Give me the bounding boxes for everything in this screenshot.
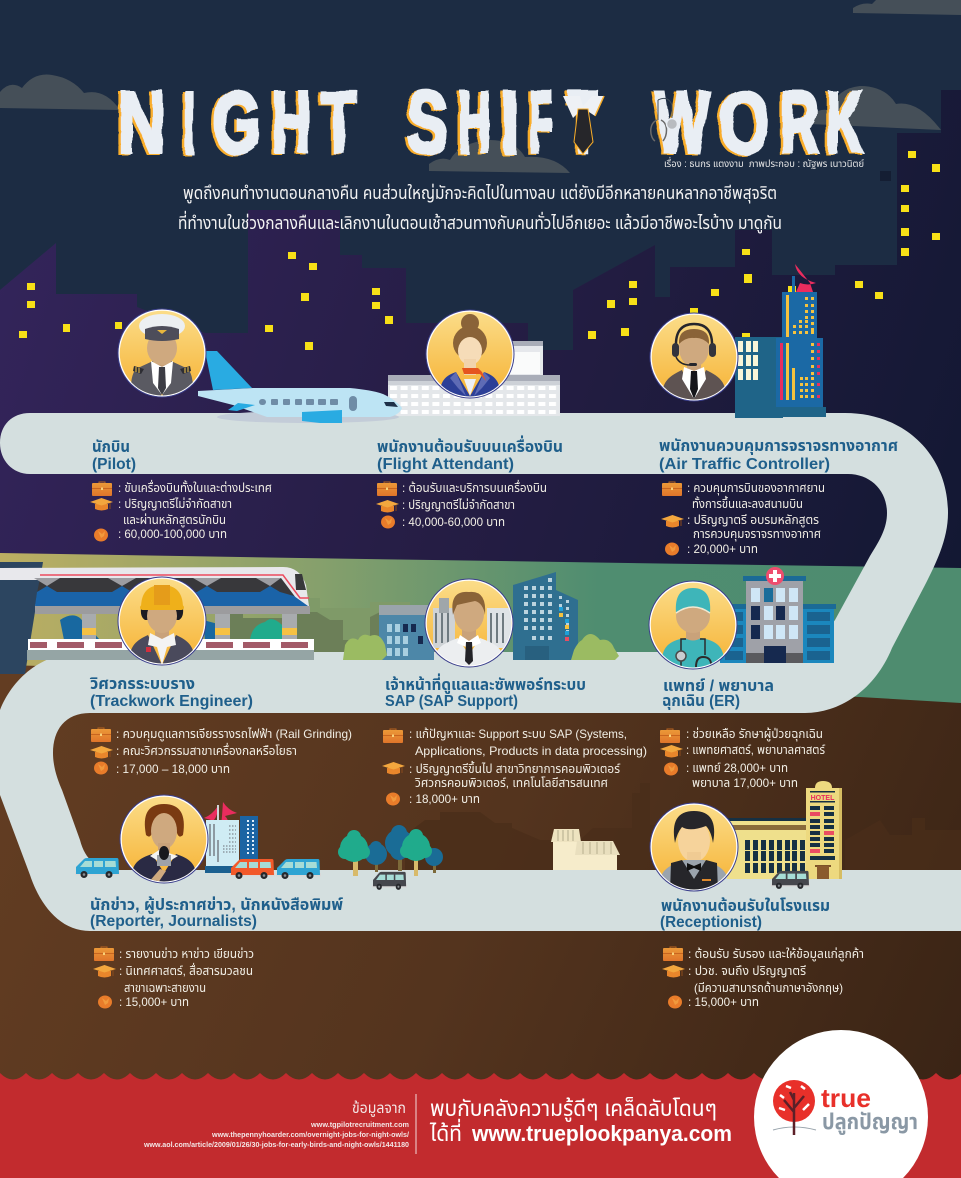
title: NIGHT SHIFT WORK: I xyxy=(183,75,195,171)
title: NIGHT SHIFT WORK: G xyxy=(213,75,261,171)
panel: reporter: : นิเทศศาสตร์, สื่อสารมวลชน xyxy=(119,962,253,978)
title: NIGHT SHIFT WORK: S xyxy=(406,75,448,171)
title: NIGHT SHIFT WORK: R xyxy=(780,75,819,171)
avatar: trackwork engineer xyxy=(118,577,206,666)
panel: trackwork engineer: : 17,000 – 18,000 บาท xyxy=(116,762,230,776)
left dark building xyxy=(0,562,43,674)
scene: hotel: HOTEL xyxy=(811,795,835,802)
brown ground xyxy=(0,665,961,1080)
title: NIGHT SHIFT WORK: I xyxy=(501,75,519,171)
panel: doctor and nurse: : ช่วยเหลือ รักษาผู้ป่วยฉุกเฉิน xyxy=(686,727,823,741)
title: NIGHT SHIFT WORK: F xyxy=(529,75,553,171)
avatar: flight attendant xyxy=(426,310,514,399)
cloud: left xyxy=(0,75,120,110)
panel: flight attendant: : ปริญญาตรีไม่จำกัดสาขา xyxy=(402,498,515,512)
logo badge xyxy=(754,1030,928,1178)
panel: doctor and nurse: : แพทย์ 28,000+ บาท xyxy=(686,761,788,775)
avatar: reporter xyxy=(120,795,208,884)
purple city skyline and night ground xyxy=(0,90,961,570)
panel: doctor and nurse: ฉุกเฉิน (ER) xyxy=(662,693,740,710)
panel: air traffic controller: : 20,000+ บาท xyxy=(687,542,758,556)
green band distant buildings xyxy=(297,598,410,655)
avatar: pilot xyxy=(118,309,206,398)
panel: air traffic controller xyxy=(659,438,898,556)
sources xyxy=(143,1100,410,1149)
car: dark by hotel xyxy=(771,871,810,889)
call to action: พบกับคลังความรู้ดีๆ เคล็ดลับโดนๆ xyxy=(430,1096,717,1122)
panel: air traffic controller: (Air Traffic Controller) xyxy=(659,456,830,473)
panel: flight attendant xyxy=(376,435,563,529)
cloud: center xyxy=(429,140,570,173)
avatar: SAP support xyxy=(425,579,513,668)
panel: SAP support: Applications, Products in data processing) xyxy=(415,744,647,758)
panel: pilot: (Pilot) xyxy=(92,456,136,473)
panel: reporter: สาขาเฉพาะสายงาน xyxy=(124,981,206,995)
icon: collar and tie on the T xyxy=(563,96,604,154)
lit windows xyxy=(19,151,940,350)
title: NIGHT SHIFT WORK: K xyxy=(826,75,863,171)
panel: SAP support: วิศวกรคอมพิวเตอร์, เทคโนโลยีสารสนเทศ xyxy=(414,776,608,790)
panel: receptionist: พนักงานต้อนรับในโรงแรม xyxy=(661,897,830,915)
panel: doctor and nurse xyxy=(660,678,826,790)
bush: right xyxy=(571,634,619,660)
scene: airplane xyxy=(198,351,402,423)
call to action: www.trueplookpanya.com xyxy=(471,1121,732,1146)
call to action xyxy=(429,1096,732,1146)
panel: SAP support: : แก้ปัญหาและ Support ระบบ SAP (Systems, xyxy=(409,727,627,741)
logo badge: true xyxy=(821,1083,871,1113)
panel: pilot: : 60,000-100,000 บาท xyxy=(118,527,227,541)
panel: reporter: (Reporter, Journalists) xyxy=(90,913,257,930)
panel: doctor and nurse: พยาบาล 17,000+ บาท xyxy=(692,776,798,790)
sources: ข้อมูลจาก xyxy=(352,1100,406,1117)
scene: air traffic control tower xyxy=(735,264,826,418)
title: NIGHT SHIFT WORK: T xyxy=(321,75,357,171)
panel: air traffic controller: พนักงานควบคุมการจราจรทางอากาศ xyxy=(659,438,898,455)
panel: receptionist: (มีความสามารถด้านภาษาอังกฤษ) xyxy=(694,981,843,995)
panel: flight attendant: : 40,000-60,000 บาท xyxy=(402,515,505,529)
avatar: receptionist xyxy=(650,803,738,892)
panel: receptionist: (Receptionist) xyxy=(660,914,762,931)
title: NIGHT SHIFT WORK: W xyxy=(655,75,710,171)
panel: SAP support: : ปริญญาตรีขึ้นไป สาขาวิทยาการคอมพิวเตอร์ xyxy=(409,760,621,776)
cloud: behind WORK xyxy=(810,86,941,130)
panel: receptionist: : ต้อนรับ รับรอง และให้ข้อมูลแก่ลูกค้า xyxy=(688,947,864,961)
panel: pilot: นักบิน xyxy=(92,439,130,456)
panel: trackwork engineer: วิศวกรระบบราง xyxy=(90,676,195,693)
intro text: พูดถึงคนทำงานตอนกลางคืน คนส่วนใหญ่มักจะคิดไปในทางลบ แต่ยังมีอีกหลายคนหลากอาชีพสุจริต xyxy=(183,183,777,205)
winding road xyxy=(0,413,961,931)
panel: doctor and nurse: แพทย์ / พยาบาล xyxy=(663,678,774,695)
call to action: ได้ที่ xyxy=(429,1118,462,1146)
byline: เรื่อง : ธนกร แตงงาม ภาพประกอบ : ณัฐพร เนาวนิตย์ xyxy=(664,156,864,170)
panel: receptionist xyxy=(660,897,864,1009)
panel: SAP support xyxy=(382,673,647,806)
panel: air traffic controller: การควบคุมจราจรทางอากาศ xyxy=(693,527,821,541)
panel: air traffic controller: ทั้งการขึ้นและลงสนามบิน xyxy=(692,495,803,511)
panel: flight attendant: (Flight Attendant) xyxy=(377,456,514,473)
scene: hospital xyxy=(718,567,836,663)
panel: reporter: : 15,000+ บาท xyxy=(119,995,189,1009)
panel: reporter: : รายงานข่าว หาข่าว เขียนข่าว xyxy=(119,947,254,961)
title: NIGHT SHIFT WORK xyxy=(118,75,863,171)
icon: stethoscope on the W xyxy=(651,98,678,141)
avatar: doctor nurse xyxy=(649,581,737,670)
cloud: top right xyxy=(853,0,961,15)
panel: air traffic controller: : ควบคุมการบินของอากาศยาน xyxy=(687,481,825,495)
scene: airport terminal xyxy=(388,341,560,416)
green dawn band xyxy=(0,553,961,710)
panel: doctor and nurse: : แพทยศาสตร์, พยาบาลศาสตร์ xyxy=(686,743,826,757)
panel: flight attendant: พนักงานต้อนรับบนเครื่องบิน xyxy=(377,435,563,456)
title: NIGHT SHIFT WORK: N xyxy=(118,75,166,171)
car: blue left xyxy=(75,858,120,878)
sources: www.aol.com/article/2009/01/26/30-jobs-for-early-birds-and-night-owls/1441180 xyxy=(143,1140,409,1149)
scene: houses xyxy=(551,829,620,870)
trees xyxy=(338,825,443,876)
bush: left xyxy=(343,635,387,660)
footer band xyxy=(0,1073,961,1178)
panel: receptionist: : ปวช. จนถึง ปริญญาตรี xyxy=(688,964,806,978)
panel: flight attendant: : ต้อนรับและบริการบนเครื่องบิน xyxy=(402,479,547,495)
intro text: ที่ทำงานในช่วงกลางคืนและเลิกงานในตอนเช้าสวนทางกับคนทั่วไปอีกเยอะ แล้วมีอาชีพอะไรบ้าง มาดูกัน xyxy=(178,210,782,235)
panel: SAP support: : 18,000+ บาท xyxy=(409,792,480,806)
title: NIGHT SHIFT WORK: H xyxy=(458,75,491,171)
title: NIGHT SHIFT WORK: T xyxy=(568,75,598,171)
scene: TV station xyxy=(204,802,258,873)
logo badge: ปลูกปัญญา xyxy=(822,1109,918,1135)
panel: SAP support: เจ้าหน้าที่ดูแลและซัพพอร์ทระบบ xyxy=(385,673,586,695)
panel: SAP support: SAP (SAP Support) xyxy=(385,693,518,710)
panel: trackwork engineer: (Trackwork Engineer) xyxy=(90,693,253,710)
panel: air traffic controller: : ปริญญาตรี อบรมหลักสูตร xyxy=(687,513,819,527)
car: blue right xyxy=(276,859,321,879)
scene: skytrain viaduct xyxy=(0,567,314,660)
sources: www.tgpilotrecruitment.com xyxy=(310,1120,409,1129)
car: orange xyxy=(230,859,275,879)
panel: pilot: : ขับเครื่องบินทั้งในและต่างประเทศ xyxy=(118,479,272,495)
panel: trackwork engineer xyxy=(90,676,352,776)
panel: reporter: นักข่าว, ผู้ประกาศข่าว, นักหนังสือพิมพ์ xyxy=(90,896,343,915)
panel: reporter xyxy=(90,896,343,1009)
panel: pilot: : ปริญญาตรีไม่จำกัดสาขา xyxy=(118,497,232,511)
title: NIGHT SHIFT WORK: O xyxy=(719,75,770,171)
scene: hotel xyxy=(727,781,842,879)
brown skyline silhouette xyxy=(405,783,961,870)
title: NIGHT SHIFT WORK: H xyxy=(272,75,311,171)
green band near buildings xyxy=(230,612,380,655)
panel: receptionist: : 15,000+ บาท xyxy=(688,995,759,1009)
panel: trackwork engineer: : ควบคุมดูแลการเจียรรางรถไฟฟ้า (Rail Grinding) xyxy=(116,727,352,741)
intro text xyxy=(178,183,782,235)
scene: SAP office buildings xyxy=(379,572,578,660)
panel: trackwork engineer: : คณะวิศวกรรมสาขาเครื่องกลหรือโยธา xyxy=(116,742,297,758)
sources: www.thepennyhoarder.com/overnight-jobs-for-night-owls/ xyxy=(211,1130,410,1139)
panel: pilot: และผ่านหลักสูตรนักบิน xyxy=(123,513,226,527)
panel: pilot xyxy=(90,439,272,542)
avatar: air traffic controller xyxy=(650,313,738,402)
car: dark by trees xyxy=(372,872,407,890)
